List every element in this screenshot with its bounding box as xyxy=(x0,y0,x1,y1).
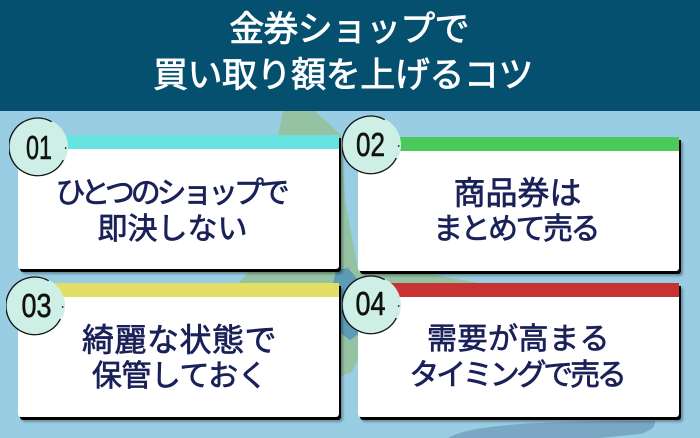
card 01 accent bar xyxy=(18,135,339,149)
card 04 accent bar xyxy=(358,283,679,297)
number badge 03: 03 xyxy=(22,287,52,324)
title line 1: 金券ショップで xyxy=(229,10,469,49)
card 04 text: 需要が高まる xyxy=(427,323,610,356)
number badge 02 xyxy=(342,115,401,174)
title line 2: 買い取り額を上げるコツ xyxy=(153,56,533,95)
card 03 text: 保管しておく xyxy=(92,360,267,393)
number badge 02: 02 xyxy=(356,126,385,163)
card 02 text: まとめて売る xyxy=(433,213,598,246)
card 03 text: 綺麗な状態で xyxy=(82,322,277,358)
panel: card 03 xyxy=(18,283,339,417)
card 01 text: ひとつのショップで xyxy=(55,177,286,210)
card 02 text xyxy=(433,175,598,246)
card 04 text xyxy=(409,322,624,392)
card 03 accent bar xyxy=(18,283,339,297)
card 02 text: 商品券は xyxy=(453,175,582,211)
card 04 text: タイミングで売る xyxy=(409,359,624,392)
card 02 accent bar xyxy=(358,137,679,151)
card 01 text xyxy=(55,177,288,246)
card 03 text xyxy=(82,322,277,393)
panel: card 04 xyxy=(358,283,679,417)
card 01 text: 即決しない xyxy=(98,213,248,246)
number badge 04: 04 xyxy=(356,285,386,322)
panel: card 02 xyxy=(358,137,679,271)
panel: card 01 xyxy=(18,135,339,269)
number badge 04 xyxy=(342,275,401,334)
number badge 01 xyxy=(9,117,68,176)
title banner xyxy=(0,0,700,111)
number badge 03 xyxy=(6,276,65,336)
number badge 01: 01 xyxy=(26,129,52,166)
